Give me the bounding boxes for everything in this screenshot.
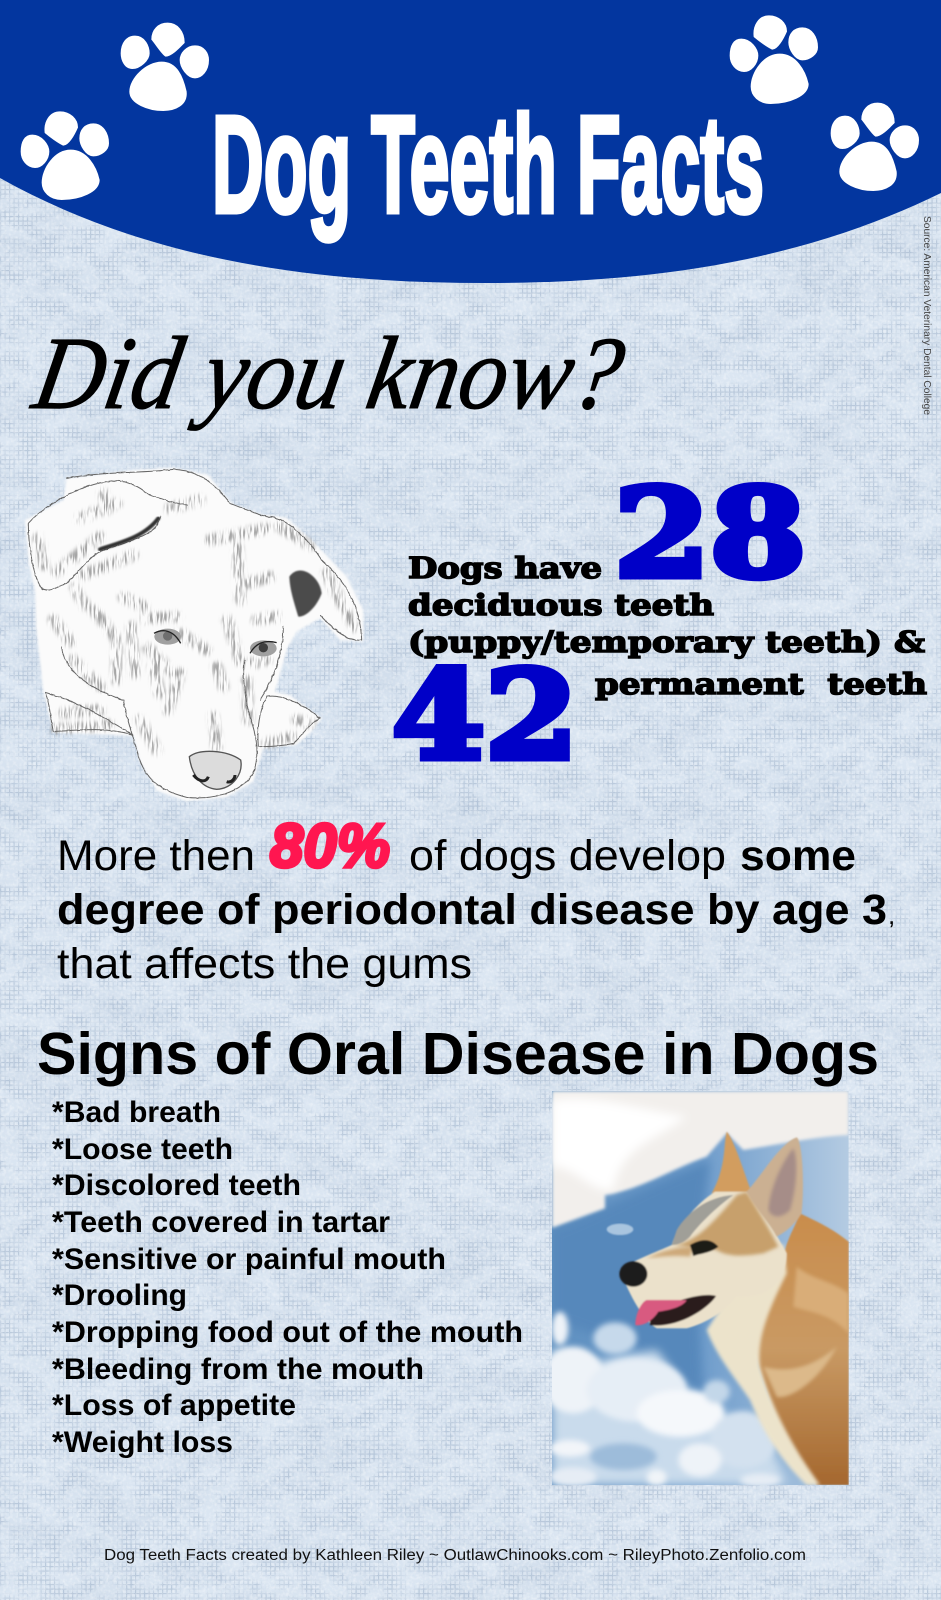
list of signs: *Loss of appetite xyxy=(52,1389,296,1422)
list of signs: *Bleeding from the mouth xyxy=(52,1353,424,1386)
dog photo in snow xyxy=(542,1091,849,1487)
nose xyxy=(619,1261,647,1287)
text: dogs have: Dogs have xyxy=(408,551,602,585)
list of signs: *Teeth covered in tartar xyxy=(52,1206,390,1239)
sketch shading xyxy=(38,493,353,750)
dog pencil sketch xyxy=(25,467,363,801)
neck outline xyxy=(45,692,133,735)
sketch white silhouette xyxy=(25,467,363,801)
number: 42: 42 xyxy=(392,643,578,787)
paw outline xyxy=(258,696,320,747)
muzzle stripe xyxy=(647,1247,693,1258)
source credit: Source: American Veterinary Dental College xyxy=(921,216,933,415)
text: puppy temporary teeth: (puppy/temporary teeth) & xyxy=(408,625,925,659)
mouth xyxy=(650,1295,716,1325)
number: 28: 28 xyxy=(614,461,806,605)
fur highlights xyxy=(763,1347,837,1397)
lower snow drifts xyxy=(542,1312,780,1487)
of dogs develop: of dogs develop xyxy=(409,832,726,880)
list of signs: *Sensitive or painful mouth xyxy=(52,1243,446,1276)
text: permanent teeth: permanent teeth xyxy=(595,667,927,701)
sketch outlines xyxy=(28,469,362,798)
icon: paw upper right xyxy=(730,16,817,103)
list of signs: *Discolored teeth xyxy=(52,1169,301,1202)
gray forehead xyxy=(672,1195,733,1245)
teeth count text block xyxy=(392,461,927,787)
muzzle outline xyxy=(62,647,257,798)
head xyxy=(620,1192,787,1328)
right ear xyxy=(747,1137,803,1237)
ear inner xyxy=(768,1148,796,1216)
ear outline xyxy=(28,481,187,590)
snow shadow base xyxy=(552,1091,849,1485)
upper snow highlights xyxy=(552,1098,687,1190)
heading: signs of oral disease: Signs of Oral Disease in Dogs xyxy=(37,1021,879,1087)
face side xyxy=(260,627,283,700)
that affects the gums: that affects the gums xyxy=(57,940,472,988)
darker left shadow xyxy=(552,1160,710,1397)
heading: did you know: Did you know? xyxy=(24,316,632,431)
list of signs: *Loose teeth xyxy=(52,1133,233,1166)
some: some xyxy=(740,832,856,880)
banner shape xyxy=(0,0,941,283)
periodontal disease statement xyxy=(57,812,895,988)
list of signs: *Dropping food out of the mouth xyxy=(52,1316,523,1349)
comma: , xyxy=(888,900,895,930)
dog figure xyxy=(619,1132,849,1485)
list of signs xyxy=(52,1096,523,1459)
more then: More then xyxy=(57,832,255,880)
head outline xyxy=(67,469,362,640)
icon: paw upper left xyxy=(121,23,208,110)
list of signs: *Bad breath xyxy=(52,1096,221,1129)
pale patch on blue xyxy=(607,1224,633,1235)
left ear xyxy=(712,1132,751,1195)
forehead tan xyxy=(673,1192,778,1256)
tongue xyxy=(635,1300,687,1325)
text: deciduous teeth: deciduous teeth xyxy=(408,588,714,622)
icon: paw lower left xyxy=(21,112,108,199)
list of signs: *Weight loss xyxy=(52,1426,233,1459)
dog body xyxy=(756,1213,849,1485)
nose xyxy=(189,751,241,789)
right eye xyxy=(250,640,277,656)
degree of periodontal disease: degree of periodontal disease by age 3 xyxy=(57,886,887,934)
stat: 80%: 80% xyxy=(270,812,390,881)
fur highlight shoulder xyxy=(793,1267,849,1333)
list of signs: *Drooling xyxy=(52,1279,187,1312)
left eye xyxy=(154,629,181,645)
lower snow mass xyxy=(552,1347,788,1485)
right ear patch xyxy=(289,570,322,617)
ear shadow xyxy=(100,518,158,549)
icon: paw lower right xyxy=(831,103,918,190)
header banner xyxy=(0,0,941,283)
footer credit: Dog Teeth Facts created by Kathleen Riley ~ OutlawChinooks.com ~ RileyPhoto.Zenfolio.com xyxy=(104,1547,806,1564)
chest cream xyxy=(707,1243,820,1485)
eye band xyxy=(690,1240,718,1256)
upper snow xyxy=(552,1091,849,1227)
